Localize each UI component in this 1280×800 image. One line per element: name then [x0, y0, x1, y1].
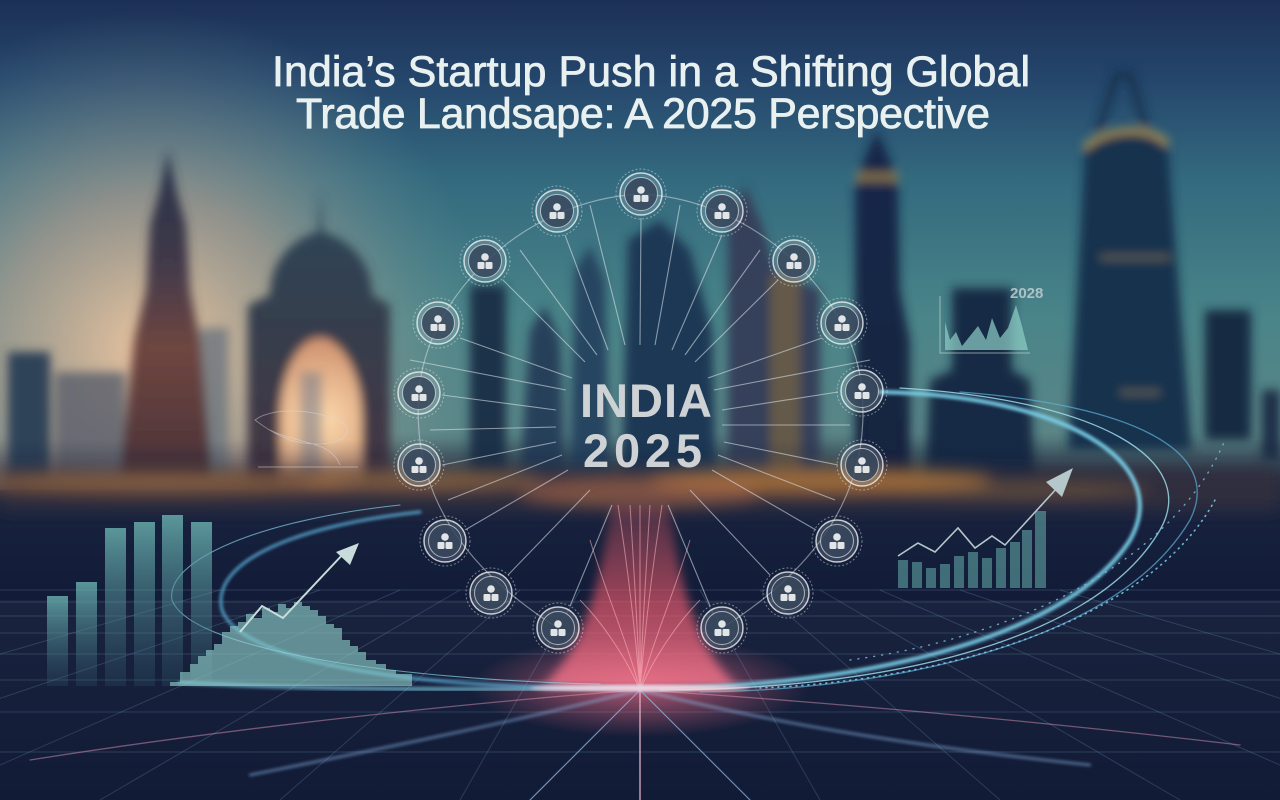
mini chart: upper left sketch: [255, 411, 358, 467]
tall towers right: [855, 130, 910, 480]
connector lines and red beam: [410, 194, 870, 690]
sunset glow: [0, 0, 500, 490]
bar chart: left: [47, 515, 212, 686]
central towers: [470, 285, 506, 485]
mini chart: 2028: 2028: [1010, 285, 1043, 302]
center label: INDIA: [580, 374, 712, 427]
floor light rays: [30, 685, 1240, 800]
outer arcs: [418, 194, 863, 628]
mini chart: 2028: [940, 285, 1043, 353]
domed arch: [248, 190, 390, 490]
temple tower: [120, 150, 212, 480]
swoosh: left blue trail: [172, 505, 640, 689]
title: Trade Landsape: A 2025 Perspective: [296, 90, 990, 138]
title: [272, 48, 1030, 138]
center label: [580, 374, 712, 477]
swoosh: right blue loop: [640, 388, 1225, 692]
bar chart with arrow: right: [898, 468, 1073, 588]
red light beam: [540, 505, 740, 688]
floor glow: [440, 620, 840, 750]
center label: 2025: [583, 424, 702, 477]
blurred lights band: [0, 468, 1280, 510]
spokes: [410, 205, 870, 606]
perspective floor grid: [0, 560, 1280, 800]
person nodes ring: [394, 169, 887, 653]
title: India’s Startup Push in a Shifting Global: [272, 48, 1030, 96]
histogram and growth arrow: left: [170, 543, 412, 686]
blurred city skyline: [8, 74, 1280, 490]
floor fade: [0, 440, 1280, 600]
